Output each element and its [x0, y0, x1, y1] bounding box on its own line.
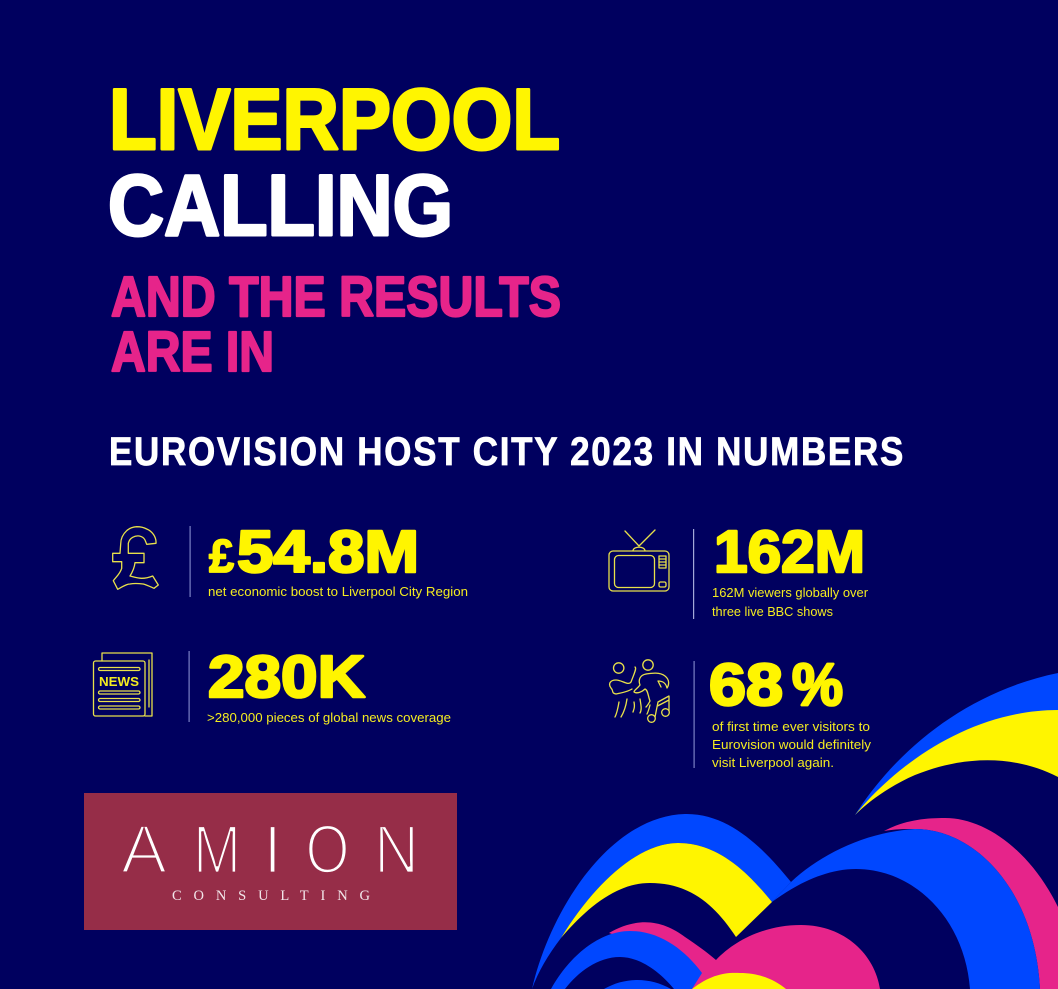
stat: returning visitors	[610, 652, 872, 770]
arc: heart right lobe blue	[772, 829, 1040, 989]
icon: pound sign	[113, 527, 158, 589]
divider	[693, 529, 694, 619]
decoration: Eurovision heart arcs	[532, 673, 1058, 989]
description: Eurovision would definitely	[712, 738, 872, 752]
value: £54.8M: 54.8M	[237, 519, 419, 585]
arc: heart left lobe blue	[532, 814, 791, 989]
divider	[694, 661, 695, 768]
value: 68%	[709, 652, 843, 718]
title: Liverpool Calling	[108, 72, 560, 254]
stat: viewers	[609, 519, 868, 619]
title: Liverpool Calling: LIVERPOOL	[109, 72, 560, 168]
heading: Eurovision host city 2023 in numbers: EUROVISION HOST CITY 2023 IN NUMBERS	[109, 430, 905, 474]
title: Liverpool Calling: CALLING	[108, 158, 453, 254]
logo: AMION Consulting: A	[121, 811, 167, 888]
logo: AMION Consulting: CONSULTING	[172, 888, 371, 904]
value: 280K: 280K	[208, 644, 365, 710]
description: 162M viewers globally over	[712, 586, 868, 600]
description: of first time ever visitors to	[712, 720, 870, 734]
arc: small blue	[604, 980, 671, 989]
logo: AMION Consulting: M	[193, 811, 241, 888]
icon: newspaper	[94, 653, 152, 716]
icon: newspaper: NEWS	[99, 675, 139, 689]
description: three live BBC shows	[712, 605, 833, 619]
stat: economic boost	[113, 519, 468, 599]
description	[712, 720, 872, 770]
description: net economic boost to Liverpool City Region	[208, 585, 468, 599]
description	[712, 586, 868, 619]
value: 68%: 68	[709, 652, 783, 718]
arc: lower pink	[609, 922, 880, 989]
arc: lower blue	[551, 931, 702, 989]
description: visit Liverpool again.	[712, 756, 834, 770]
logo: AMION Consulting	[84, 793, 457, 930]
arc: right pink	[884, 818, 1058, 989]
icon: television	[609, 530, 669, 591]
stat: news coverage	[94, 644, 451, 725]
icon: dancers and music note	[610, 660, 669, 722]
arc: yellow	[561, 843, 772, 938]
logo: AMION Consulting: N	[374, 811, 419, 888]
subtitle: and the results are in	[111, 265, 561, 384]
arc: top right blue and yellow	[855, 673, 1058, 815]
value: 68%: %	[792, 652, 843, 718]
arc: bottom yellow	[692, 973, 786, 989]
description: >280,000 pieces of global news coverage	[207, 711, 451, 725]
subtitle: and the results are in: AND THE RESULTS	[111, 265, 561, 329]
logo: AMION Consulting: I	[263, 811, 282, 888]
value: £54.8M: £	[209, 530, 234, 582]
subtitle: and the results are in: ARE IN	[111, 320, 274, 384]
divider	[190, 526, 191, 597]
value: 162M: 162M	[714, 519, 865, 585]
divider	[188, 651, 190, 722]
logo: AMION Consulting: O	[306, 811, 350, 888]
